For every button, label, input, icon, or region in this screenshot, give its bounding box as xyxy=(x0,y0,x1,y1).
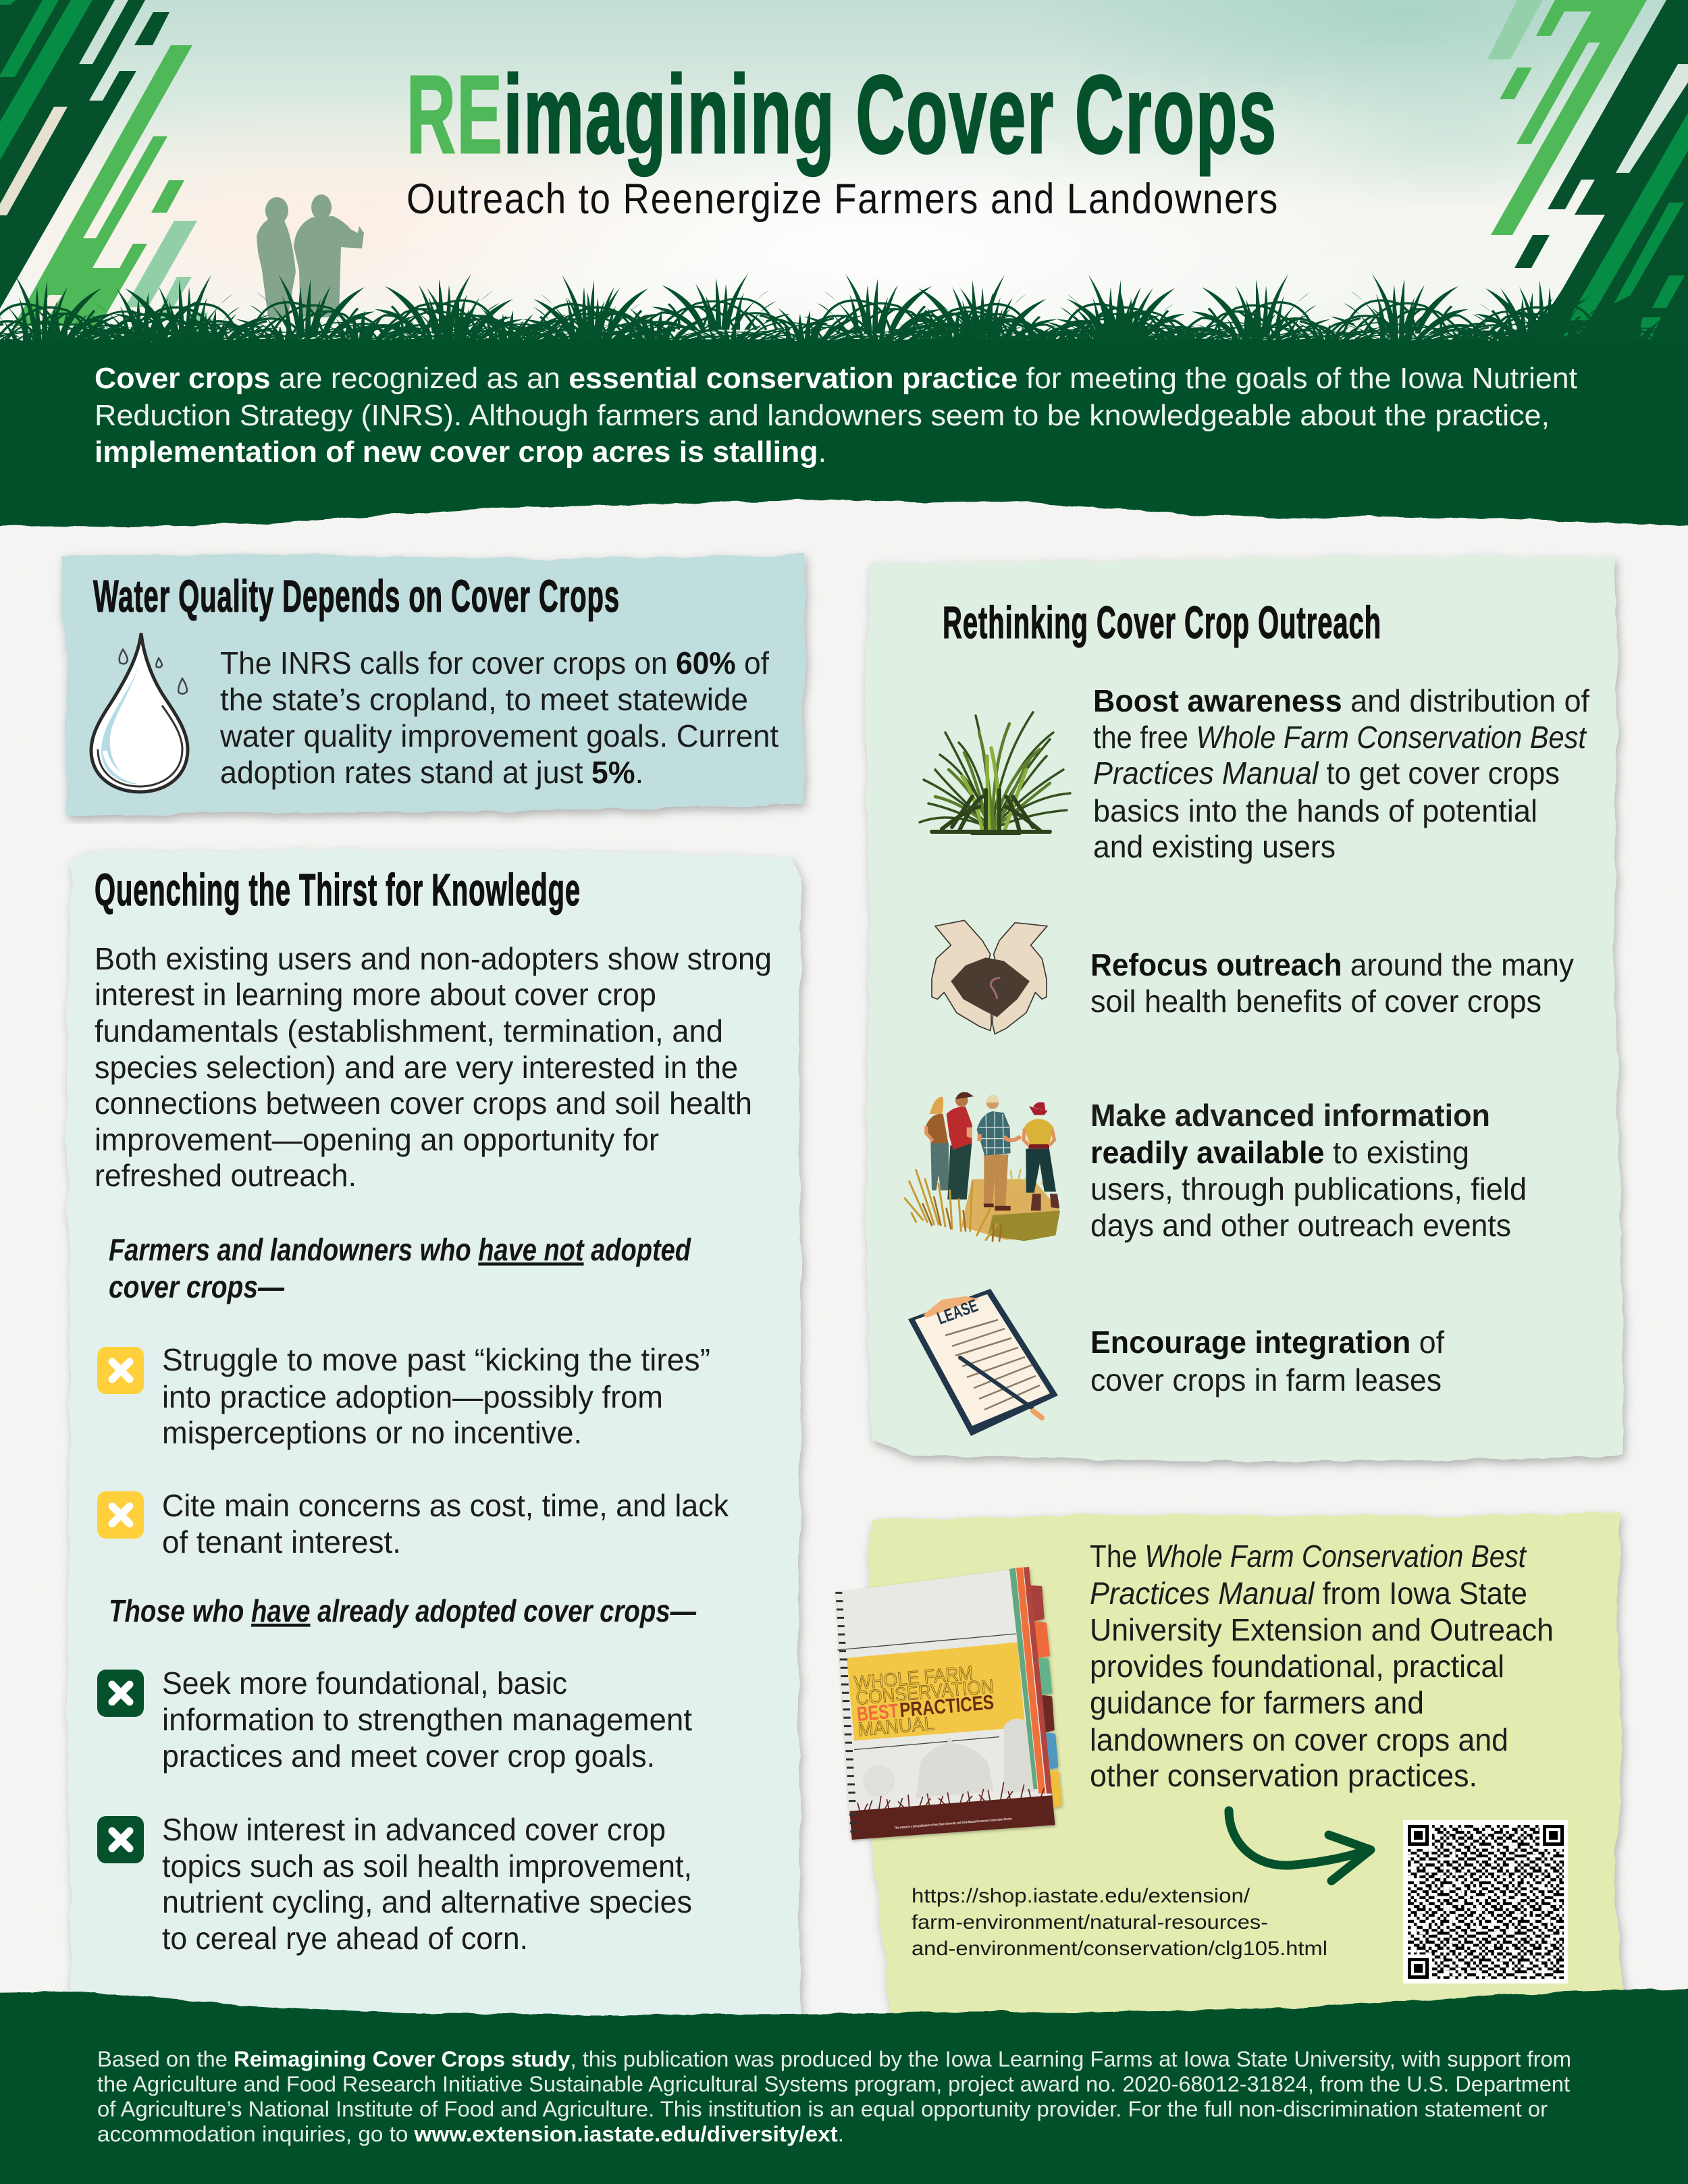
icon: manual book cover: PRACTICES xyxy=(899,1691,995,1722)
text block: soil health benefits of cover crops xyxy=(1090,984,1541,1019)
intro green band with torn edge xyxy=(0,340,1688,527)
panel text xyxy=(1090,1539,1554,1793)
footer text: the Agriculture and Food Research Initiative Sustainable Agricultural Systems program, project award no. 2020-68012-31824, from the U.S. Department xyxy=(97,2072,1570,2096)
panel: conservation manual xyxy=(835,1512,1627,2032)
list item xyxy=(162,1812,692,1956)
list item: into practice adoption—possibly from xyxy=(162,1379,663,1414)
text block xyxy=(1090,947,1574,1019)
url text: farm-environment/natural-resources- xyxy=(912,1911,1268,1934)
text block: Make advanced information xyxy=(1090,1098,1490,1133)
list item: nutrient cycling, and alternative species xyxy=(162,1884,692,1919)
panel background xyxy=(61,554,806,816)
panel background xyxy=(866,556,1624,1462)
subheading: non-adopters: Farmers and landowners who have not adopted xyxy=(109,1232,691,1267)
text block: Encourage integration of xyxy=(1090,1325,1444,1360)
icon: yellow x xyxy=(97,1491,144,1539)
panel text: other conservation practices. xyxy=(1090,1758,1477,1793)
footer band xyxy=(0,1988,1688,2184)
icon: yellow x xyxy=(97,1347,144,1394)
panel text: the state’s cropland, to meet statewide xyxy=(220,682,748,717)
text block: basics into the hands of potential xyxy=(1093,793,1537,828)
text block: Practices Manual to get cover crops xyxy=(1093,755,1560,791)
icon: manual book cover: CONSERVATION xyxy=(855,1676,995,1709)
list item: information to strengthen management xyxy=(162,1702,692,1737)
body paragraph: connections between cover crops and soil health xyxy=(95,1086,752,1121)
list item: practices and meet cover crop goals. xyxy=(162,1738,655,1774)
icon: lease clipboard: LEASE xyxy=(934,1295,980,1329)
body paragraph: improvement—opening an opportunity for xyxy=(95,1122,659,1157)
QR code xyxy=(1403,1820,1568,1983)
icon: water drop xyxy=(91,633,188,792)
list item: of tenant interest. xyxy=(162,1524,401,1560)
text block: the free Whole Farm Conservation Best xyxy=(1093,720,1587,755)
footer text: of Agriculture’s National Institute of Food and Agriculture. This institution is an equal opportunity provider. For the full non-discrimination statement or xyxy=(97,2097,1548,2121)
panel: quenching the thirst xyxy=(66,849,801,2032)
panel text: Practices Manual from Iowa State xyxy=(1090,1576,1527,1611)
body paragraph xyxy=(95,941,772,1193)
icon: group of farmers xyxy=(905,1092,1060,1241)
list item xyxy=(162,1488,729,1560)
text block: Refocus outreach around the many xyxy=(1090,947,1574,982)
heading: Water Quality Depends on Cover Crops xyxy=(93,571,620,622)
icon: lease clipboard xyxy=(908,1289,1058,1436)
icon: dark green x xyxy=(97,1816,144,1863)
panel: water quality xyxy=(61,554,806,816)
text block: users, through publications, field xyxy=(1090,1171,1527,1206)
text block xyxy=(1090,1098,1527,1243)
panel: rethinking outreach xyxy=(866,556,1624,1462)
arrow xyxy=(1229,1811,1371,1881)
panel text: University Extension and Outreach xyxy=(1090,1612,1554,1647)
url text: https://shop.iastate.edu/extension/ xyxy=(912,1885,1250,1907)
panel text: landowners on cover crops and xyxy=(1090,1722,1508,1757)
text block: days and other outreach events xyxy=(1090,1208,1511,1243)
panel background xyxy=(66,849,801,2032)
list item: Cite main concerns as cost, time, and lack xyxy=(162,1488,729,1523)
icon: manual book cover: This manual is a joint publication of Iowa State University and USDA Natural Resources Conservation Service. xyxy=(895,1817,1013,1830)
list item: Seek more foundational, basic xyxy=(162,1666,567,1701)
silhouettes of two farmers xyxy=(257,194,364,317)
panel background xyxy=(868,1512,1627,2032)
icon: manual book cover: WHOLE FARM xyxy=(853,1662,974,1695)
list item xyxy=(162,1342,710,1450)
icon: manual book cover: MANUAL xyxy=(857,1713,935,1741)
icon: manual book cover: BEST xyxy=(856,1700,899,1726)
text block: cover crops in farm leases xyxy=(1090,1362,1442,1397)
url text xyxy=(912,1885,1327,1960)
text block: Boost awareness and distribution of xyxy=(1093,683,1589,718)
text block xyxy=(1090,1325,1444,1397)
heading: Quenching the Thirst for Knowledge xyxy=(95,865,581,915)
subheading: adopters: Those who have already adopted cover crops— xyxy=(109,1593,697,1628)
header sky xyxy=(0,0,1688,378)
subtitle: Outreach to Reenergize Farmers and Landowners xyxy=(406,176,1279,223)
footer text xyxy=(97,2047,1571,2146)
icon: grass tuft xyxy=(920,712,1070,833)
left diagonal stripes xyxy=(0,0,208,341)
body paragraph: refreshed outreach. xyxy=(95,1158,357,1193)
icon: manual book cover xyxy=(835,1567,1061,1840)
footer text: Based on the Reimagining Cover Crops study , this publication was produced by the Iowa Learning Farms at Iowa State University, with support from xyxy=(97,2047,1571,2071)
text block: readily available to existing xyxy=(1090,1135,1469,1170)
panel text: water quality improvement goals. Current xyxy=(219,718,779,753)
list item: misperceptions or no incentive. xyxy=(162,1415,582,1450)
subheading: non-adopters xyxy=(109,1232,691,1304)
grass band xyxy=(0,273,1688,342)
tabs xyxy=(1031,1587,1061,1806)
intro text: Reduction Strategy (INRS). Although farmers and landowners seem to be knowledgeable about the practice, xyxy=(95,399,1550,432)
footer text: accommodation inquiries, go to www.extension.iastate.edu/diversity/ext . xyxy=(97,2122,844,2146)
panel text: The Whole Farm Conservation Best xyxy=(1090,1539,1527,1574)
body paragraph: species selection) and are very interested in the xyxy=(95,1050,738,1085)
list item: topics such as soil health improvement, xyxy=(162,1848,692,1884)
subheading: non-adopters: cover crops— xyxy=(109,1269,285,1304)
intro text: Cover crops are recognized as an essential conservation practice for meeting the goals of the Iowa Nutrient xyxy=(95,362,1577,395)
body paragraph: interest in learning more about cover crop xyxy=(95,977,656,1012)
body paragraph: fundamentals (establishment, termination, and xyxy=(95,1013,723,1048)
list item: to cereal rye ahead of corn. xyxy=(162,1921,528,1956)
panel text: adoption rates stand at just 5%. xyxy=(220,755,643,790)
body paragraph: Both existing users and non-adopters show strong xyxy=(95,941,772,976)
icon: dark green x xyxy=(97,1670,144,1717)
panel text: The INRS calls for cover crops on 60% of xyxy=(220,645,769,681)
list item: Struggle to move past “kicking the tires” xyxy=(162,1342,710,1377)
url text: and-environment/conservation/clg105.html xyxy=(912,1938,1327,1960)
icon: hands holding soil xyxy=(932,920,1047,1034)
text block xyxy=(1093,683,1589,864)
panel text xyxy=(219,645,779,790)
text block: and existing users xyxy=(1093,829,1336,864)
heading: Rethinking Cover Crop Outreach xyxy=(943,597,1381,648)
right diagonal stripes xyxy=(1487,0,1688,341)
panel text: provides foundational, practical xyxy=(1090,1649,1504,1684)
list item: Show interest in advanced cover crop xyxy=(162,1812,666,1847)
intro text xyxy=(95,362,1577,469)
panel text: guidance for farmers and xyxy=(1090,1685,1424,1720)
list item xyxy=(162,1666,692,1774)
intro text: implementation of new cover crop acres is stalling . xyxy=(95,435,826,469)
